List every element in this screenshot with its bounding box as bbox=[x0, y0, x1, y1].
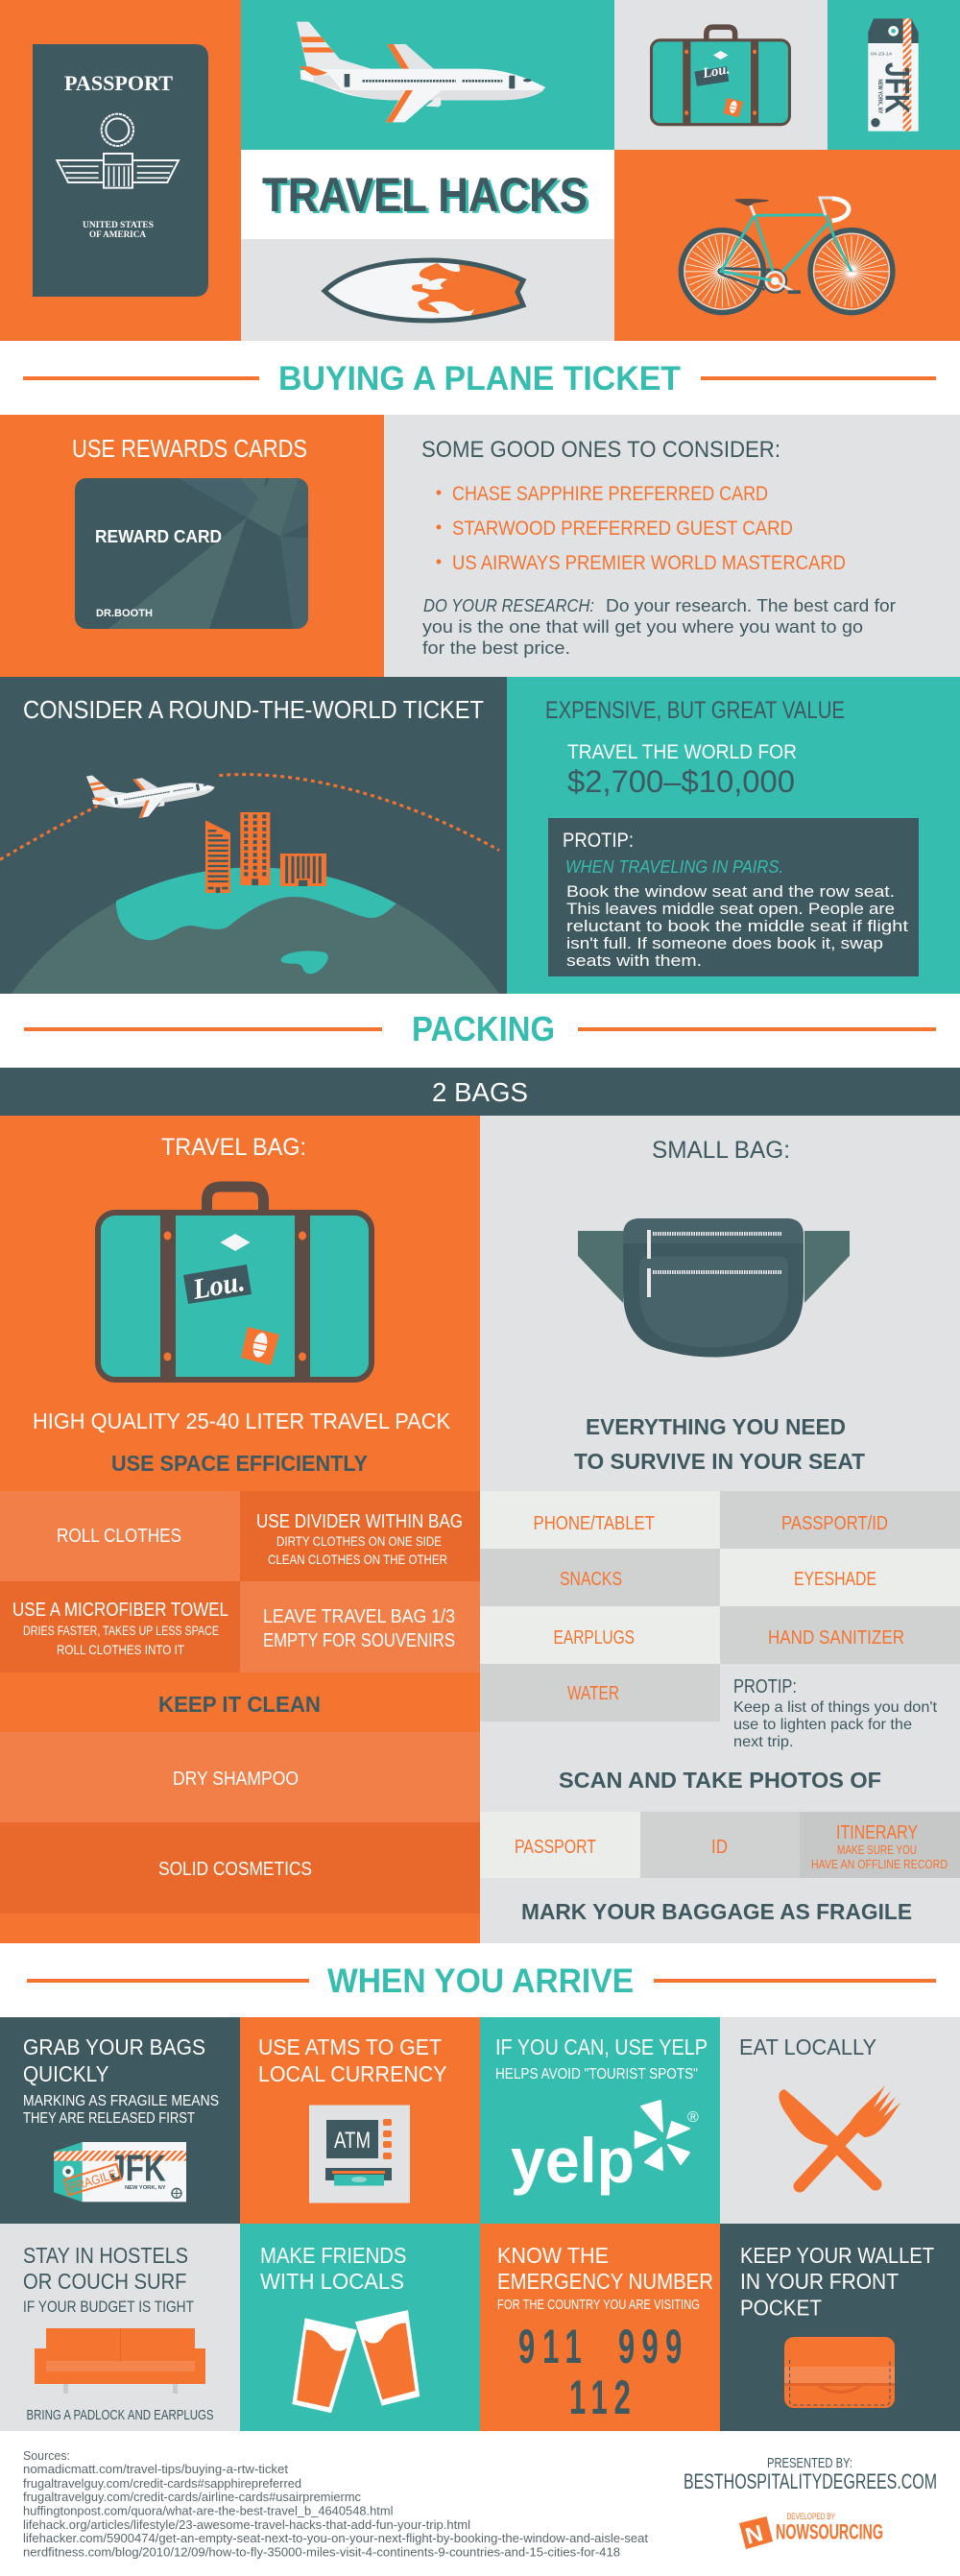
panel: make friends: MAKE FRIENDS bbox=[260, 2243, 407, 2268]
icon: bicycle bbox=[681, 198, 893, 313]
callout: small bag protip: next trip. bbox=[733, 1734, 793, 1750]
icon: passport booklet: OF AMERICA bbox=[89, 229, 147, 239]
price: TRAVEL THE WORLD FOR bbox=[567, 741, 797, 763]
tip: microfiber towel: ROLL CLOTHES INTO IT bbox=[57, 1642, 184, 1657]
item: solid cosmetics bbox=[0, 1822, 480, 1914]
panel: passport bbox=[0, 0, 241, 341]
card list: STARWOOD PREFERRED GUEST CARD bbox=[452, 518, 793, 540]
panel: grab your bags bbox=[0, 2017, 240, 2224]
sources bbox=[23, 2448, 648, 2560]
item: hand sanitizer: HAND SANITIZER bbox=[768, 1627, 904, 1649]
icon: knife and fork bbox=[779, 2085, 900, 2186]
panel: luggage tag bbox=[828, 0, 960, 150]
price: $2,700–$10,000 bbox=[567, 764, 795, 799]
callout: protip: isn't full. If someone does book it, swap bbox=[566, 934, 883, 952]
panel: hostels: STAY IN HOSTELS bbox=[23, 2243, 188, 2268]
item: earplugs: EARPLUGS bbox=[553, 1627, 635, 1649]
banner: 2 bags: 2 BAGS bbox=[432, 1077, 528, 1107]
panel: keep your wallet: POCKET bbox=[740, 2295, 822, 2320]
icon: surfboard bbox=[324, 259, 538, 323]
sources: huffingtonpost.com/quora/what-are-the-best-travel_b_4640548.html bbox=[23, 2504, 394, 2517]
icon: passport booklet: UNITED STATES bbox=[83, 220, 154, 229]
item: snacks: SNACKS bbox=[560, 1569, 622, 1590]
emergency numbers bbox=[518, 2319, 682, 2424]
panel: grab your bags: THEY ARE RELEASED FIRST bbox=[23, 2110, 195, 2127]
panel: use atms: USE ATMS TO GET bbox=[258, 2034, 442, 2059]
globe illustration bbox=[0, 773, 500, 994]
sources: nerdfitness.com/blog/2010/12/09/how-to-fly-35000-miles-visit-4-continents-9-countries-and-15-cities-for-418 bbox=[23, 2544, 620, 2560]
tip: divider: CLEAN CLOTHES ON THE OTHER bbox=[268, 1552, 447, 1567]
icon: suitcase large: Lou. bbox=[190, 1265, 247, 1306]
sources: Sources: bbox=[23, 2448, 70, 2463]
sources: nomadicmatt.com/travel-tips/buying-a-rtw-ticket bbox=[23, 2462, 288, 2476]
callout: protip: WHEN TRAVELING IN PAIRS. bbox=[565, 857, 783, 877]
research note: Do your research. The best card for bbox=[606, 596, 896, 615]
icon: airplane bbox=[297, 22, 545, 122]
icon: yelp logo bbox=[511, 2101, 699, 2196]
research note bbox=[422, 596, 896, 658]
panel: make friends bbox=[240, 2224, 480, 2431]
icon: reward card: REWARD CARD bbox=[95, 527, 222, 546]
panel: grab your bags: GRAB YOUR BAGS bbox=[23, 2034, 205, 2059]
section heading: packing bbox=[24, 1009, 936, 1048]
heading: EXPENSIVE, BUT GREAT VALUE bbox=[545, 697, 845, 724]
item: solid cosmetics: SOLID COSMETICS bbox=[158, 1859, 312, 1880]
tip: microfiber towel: DRIES FASTER, TAKES UP LESS SPACE bbox=[23, 1623, 219, 1638]
research note: for the best price. bbox=[422, 638, 570, 658]
item: id scan bbox=[640, 1812, 800, 1878]
section heading: buying a plane ticket: BUYING A PLANE TICKET bbox=[278, 360, 681, 397]
panel: use atms: LOCAL CURRENCY bbox=[258, 2061, 447, 2086]
text: pack size: HIGH QUALITY 25-40 LITER TRAVEL PACK bbox=[33, 1408, 451, 1433]
panel: eat locally bbox=[720, 2017, 960, 2224]
icon: yelp logo: ® bbox=[687, 2109, 699, 2126]
callout: small bag protip: PROTIP: bbox=[733, 1676, 797, 1697]
heading: use space efficiently: USE SPACE EFFICIENTLY bbox=[111, 1451, 368, 1476]
tip: leave room bbox=[240, 1581, 480, 1673]
logo: nowsourcing bbox=[739, 2512, 883, 2550]
panel: keep your wallet bbox=[720, 2224, 960, 2431]
emergency numbers: 911 bbox=[518, 2319, 582, 2373]
panel: expensive but great value bbox=[507, 677, 960, 994]
tip: leave room: EMPTY FOR SOUVENIRS bbox=[263, 1630, 455, 1651]
panel: make friends: WITH LOCALS bbox=[260, 2269, 404, 2294]
item: passport scan: PASSPORT bbox=[515, 1837, 596, 1858]
heading: keep it clean: KEEP IT CLEAN bbox=[158, 1692, 321, 1717]
section heading: buying a plane ticket bbox=[23, 360, 936, 397]
icon: passport booklet bbox=[33, 44, 208, 297]
heading: mark baggage fragile: MARK YOUR BAGGAGE AS FRAGILE bbox=[521, 1899, 912, 1924]
panel: surfboard bbox=[241, 239, 614, 341]
building: low block bbox=[280, 854, 326, 886]
section heading: when you arrive bbox=[27, 1962, 936, 2000]
icon: reward card bbox=[75, 478, 308, 629]
callout: protip: PROTIP: bbox=[563, 830, 634, 852]
logo: nowsourcing: DEVELOPED BY bbox=[787, 2512, 835, 2521]
icon: fragile luggage tag: FRAGILE bbox=[68, 2167, 118, 2195]
panel: emergency number: FOR THE COUNTRY YOU ARE VISITING bbox=[497, 2297, 700, 2313]
card list: CHASE SAPPHIRE PREFERRED CARD bbox=[452, 483, 768, 505]
panel: some good ones to consider bbox=[384, 415, 960, 677]
section heading: when you arrive: WHEN YOU ARRIVE bbox=[327, 1962, 634, 2000]
callout: protip: reluctant to book the middle seat if flight bbox=[566, 917, 908, 935]
panel: hostels: BRING A PADLOCK AND EARPLUGS bbox=[27, 2407, 213, 2423]
item: phone/tablet bbox=[480, 1491, 720, 1549]
callout: protip: This leaves middle seat open. People are bbox=[566, 900, 895, 918]
panel: emergency number bbox=[480, 2224, 720, 2431]
item: itinerary scan bbox=[800, 1812, 960, 1878]
icon: passport booklet: PASSPORT bbox=[64, 71, 173, 95]
section heading: packing: PACKING bbox=[412, 1009, 555, 1048]
panel: keep your wallet: IN YOUR FRONT bbox=[740, 2269, 899, 2294]
panel: use rewards cards bbox=[0, 415, 384, 677]
callout: small bag protip bbox=[733, 1676, 938, 1750]
icon: clinking glasses bbox=[292, 2310, 420, 2413]
icon: suitcase bbox=[652, 27, 789, 125]
panel: bicycle bbox=[614, 150, 960, 341]
item: phone/tablet: PHONE/TABLET bbox=[534, 1513, 655, 1534]
item: id scan: ID bbox=[711, 1837, 728, 1858]
item: snacks bbox=[480, 1549, 720, 1606]
tip: roll clothes bbox=[0, 1491, 240, 1581]
icon: small airplane bbox=[86, 755, 218, 826]
tip: divider: USE DIVIDER WITHIN BAG bbox=[256, 1511, 463, 1532]
icon: wallet bbox=[784, 2337, 895, 2408]
panel: use yelp: IF YOU CAN, USE YELP bbox=[495, 2034, 708, 2059]
tip: divider bbox=[240, 1491, 480, 1581]
tip: divider: DIRTY CLOTHES ON ONE SIDE bbox=[276, 1533, 442, 1549]
callout: small bag protip: Keep a list of things you don't bbox=[733, 1699, 938, 1716]
heading: USE REWARDS CARDS bbox=[72, 434, 307, 463]
sources: frugaltravelguy.com/credit-cards/airline-cards#usairpremiermc bbox=[23, 2490, 361, 2504]
item: dry shampoo: DRY SHAMPOO bbox=[173, 1769, 299, 1790]
icon: reward card: DR.BOOTH bbox=[96, 608, 153, 619]
emergency numbers: 112 bbox=[569, 2370, 631, 2424]
tip: microfiber towel bbox=[0, 1581, 240, 1673]
icon: fragile luggage tag bbox=[54, 2142, 186, 2202]
card list: US AIRWAYS PREMIER WORLD MASTERCARD bbox=[452, 552, 846, 574]
panel: hostels: IF YOUR BUDGET IS TIGHT bbox=[23, 2298, 194, 2316]
banner: 2 bags bbox=[0, 1068, 960, 1116]
panel: use yelp bbox=[480, 2017, 720, 2224]
panel: eat locally: EAT LOCALLY bbox=[739, 2034, 876, 2059]
sources: lifehack.org/articles/lifestyle/23-awesome-travel-hacks-that-add-fun-your-trip.html bbox=[23, 2517, 470, 2532]
panel: emergency number: KNOW THE bbox=[497, 2243, 609, 2268]
callout: protip bbox=[548, 818, 919, 976]
title panel bbox=[241, 150, 614, 239]
heading: SMALL BAG: bbox=[652, 1137, 790, 1164]
logo: nowsourcing: NOWSOURCING bbox=[776, 2519, 883, 2544]
emergency numbers: 999 bbox=[618, 2319, 682, 2373]
building: tower two bbox=[240, 812, 270, 885]
heading: everything you need: EVERYTHING YOU NEED bbox=[586, 1414, 846, 1439]
panel: grab your bags: MARKING AS FRAGILE MEANS bbox=[23, 2093, 219, 2109]
icon: atm machine: ATM bbox=[334, 2128, 371, 2154]
logo: nowsourcing: N bbox=[743, 2520, 766, 2550]
title panel: TRAVEL HACKS bbox=[265, 170, 590, 224]
panel: suitcase: Lou. bbox=[701, 61, 731, 82]
price bbox=[567, 741, 797, 799]
panel: use yelp: HELPS AVOID "TOURIST SPOTS" bbox=[495, 2066, 698, 2082]
tip: leave room: LEAVE TRAVEL BAG 1/3 bbox=[263, 1606, 455, 1627]
item: passport/id bbox=[720, 1491, 960, 1549]
research note: DO YOUR RESEARCH: bbox=[423, 596, 594, 615]
panel: suitcase bbox=[614, 0, 828, 150]
item: passport scan bbox=[480, 1812, 640, 1878]
sources: frugaltravelguy.com/credit-cards#sapphirepreferred bbox=[23, 2476, 301, 2491]
heading: everything you need bbox=[574, 1414, 865, 1474]
item: water bbox=[480, 1664, 720, 1721]
item: eyeshade bbox=[720, 1549, 960, 1606]
panel: airplane bbox=[241, 0, 614, 150]
panel: round-the-world ticket bbox=[0, 677, 507, 994]
heading: TRAVEL BAG: bbox=[161, 1134, 306, 1161]
icon: waist bag bbox=[578, 1218, 850, 1358]
icon: suitcase large bbox=[98, 1187, 372, 1380]
panel: emergency number: EMERGENCY NUMBER bbox=[497, 2269, 713, 2294]
research note: you is the one that will get you where you want to go bbox=[422, 617, 863, 637]
icon: sofa bbox=[35, 2328, 205, 2394]
heading: CONSIDER A ROUND-THE-WORLD TICKET bbox=[23, 695, 484, 724]
sources: lifehacker.com/5900474/get-an-empty-seat-next-to-you-on-your-next-flight-by-booking-the-window-and-aisle-seat bbox=[23, 2531, 648, 2545]
panel: grab your bags: QUICKLY bbox=[23, 2061, 109, 2086]
callout: protip: seats with them. bbox=[566, 951, 702, 970]
icon: JFK luggage tag bbox=[868, 18, 919, 132]
item: hand sanitizer bbox=[720, 1606, 960, 1664]
item: passport/id: PASSPORT/ID bbox=[781, 1513, 888, 1534]
building: tower one bbox=[205, 820, 230, 893]
tip: roll clothes: ROLL CLOTHES bbox=[57, 1526, 181, 1547]
panel: small bag bbox=[480, 1116, 960, 1943]
item: itinerary scan: MAKE SURE YOU bbox=[837, 1842, 917, 1857]
icon: fragile luggage tag: JFK bbox=[108, 2148, 166, 2190]
callout: protip: Book the window seat and the row seat. bbox=[566, 882, 895, 901]
panel: use atms bbox=[240, 2017, 480, 2224]
item: water: WATER bbox=[567, 1683, 619, 1704]
icon: JFK luggage tag: 04-23-14 bbox=[871, 52, 892, 58]
title: TRAVEL HACKS bbox=[262, 168, 588, 222]
heading: SOME GOOD ONES TO CONSIDER: bbox=[421, 437, 780, 463]
panel: hostels: OR COUCH SURF bbox=[23, 2269, 186, 2294]
icon: fragile luggage tag: NEW YORK, NY bbox=[125, 2185, 166, 2191]
panel: hostels bbox=[0, 2224, 240, 2431]
icon: atm machine bbox=[309, 2105, 410, 2203]
heading: scan and take photos: SCAN AND TAKE PHOTOS OF bbox=[559, 1768, 881, 1793]
tip: microfiber towel: USE A MICROFIBER TOWEL bbox=[12, 1600, 228, 1621]
item: itinerary scan: ITINERARY bbox=[836, 1822, 918, 1843]
item: earplugs bbox=[480, 1606, 720, 1664]
icon: yelp logo: yelp bbox=[511, 2125, 635, 2196]
callout: small bag protip: use to lighten pack for the bbox=[733, 1717, 912, 1733]
icon: JFK luggage tag: NEW YORK, NY bbox=[876, 79, 882, 113]
panel: keep your wallet: KEEP YOUR WALLET bbox=[740, 2243, 934, 2268]
panel: travel bag bbox=[0, 1116, 480, 1943]
item: eyeshade: EYESHADE bbox=[794, 1569, 876, 1590]
heading: everything you need: TO SURVIVE IN YOUR SEAT bbox=[574, 1449, 865, 1474]
item: dry shampoo bbox=[0, 1732, 480, 1822]
icon: JFK luggage tag: JFK bbox=[877, 62, 915, 113]
credits: presented by bbox=[684, 2455, 937, 2493]
credits: presented by: PRESENTED BY: bbox=[767, 2455, 852, 2471]
card list bbox=[436, 483, 846, 574]
header collage bbox=[0, 0, 960, 341]
